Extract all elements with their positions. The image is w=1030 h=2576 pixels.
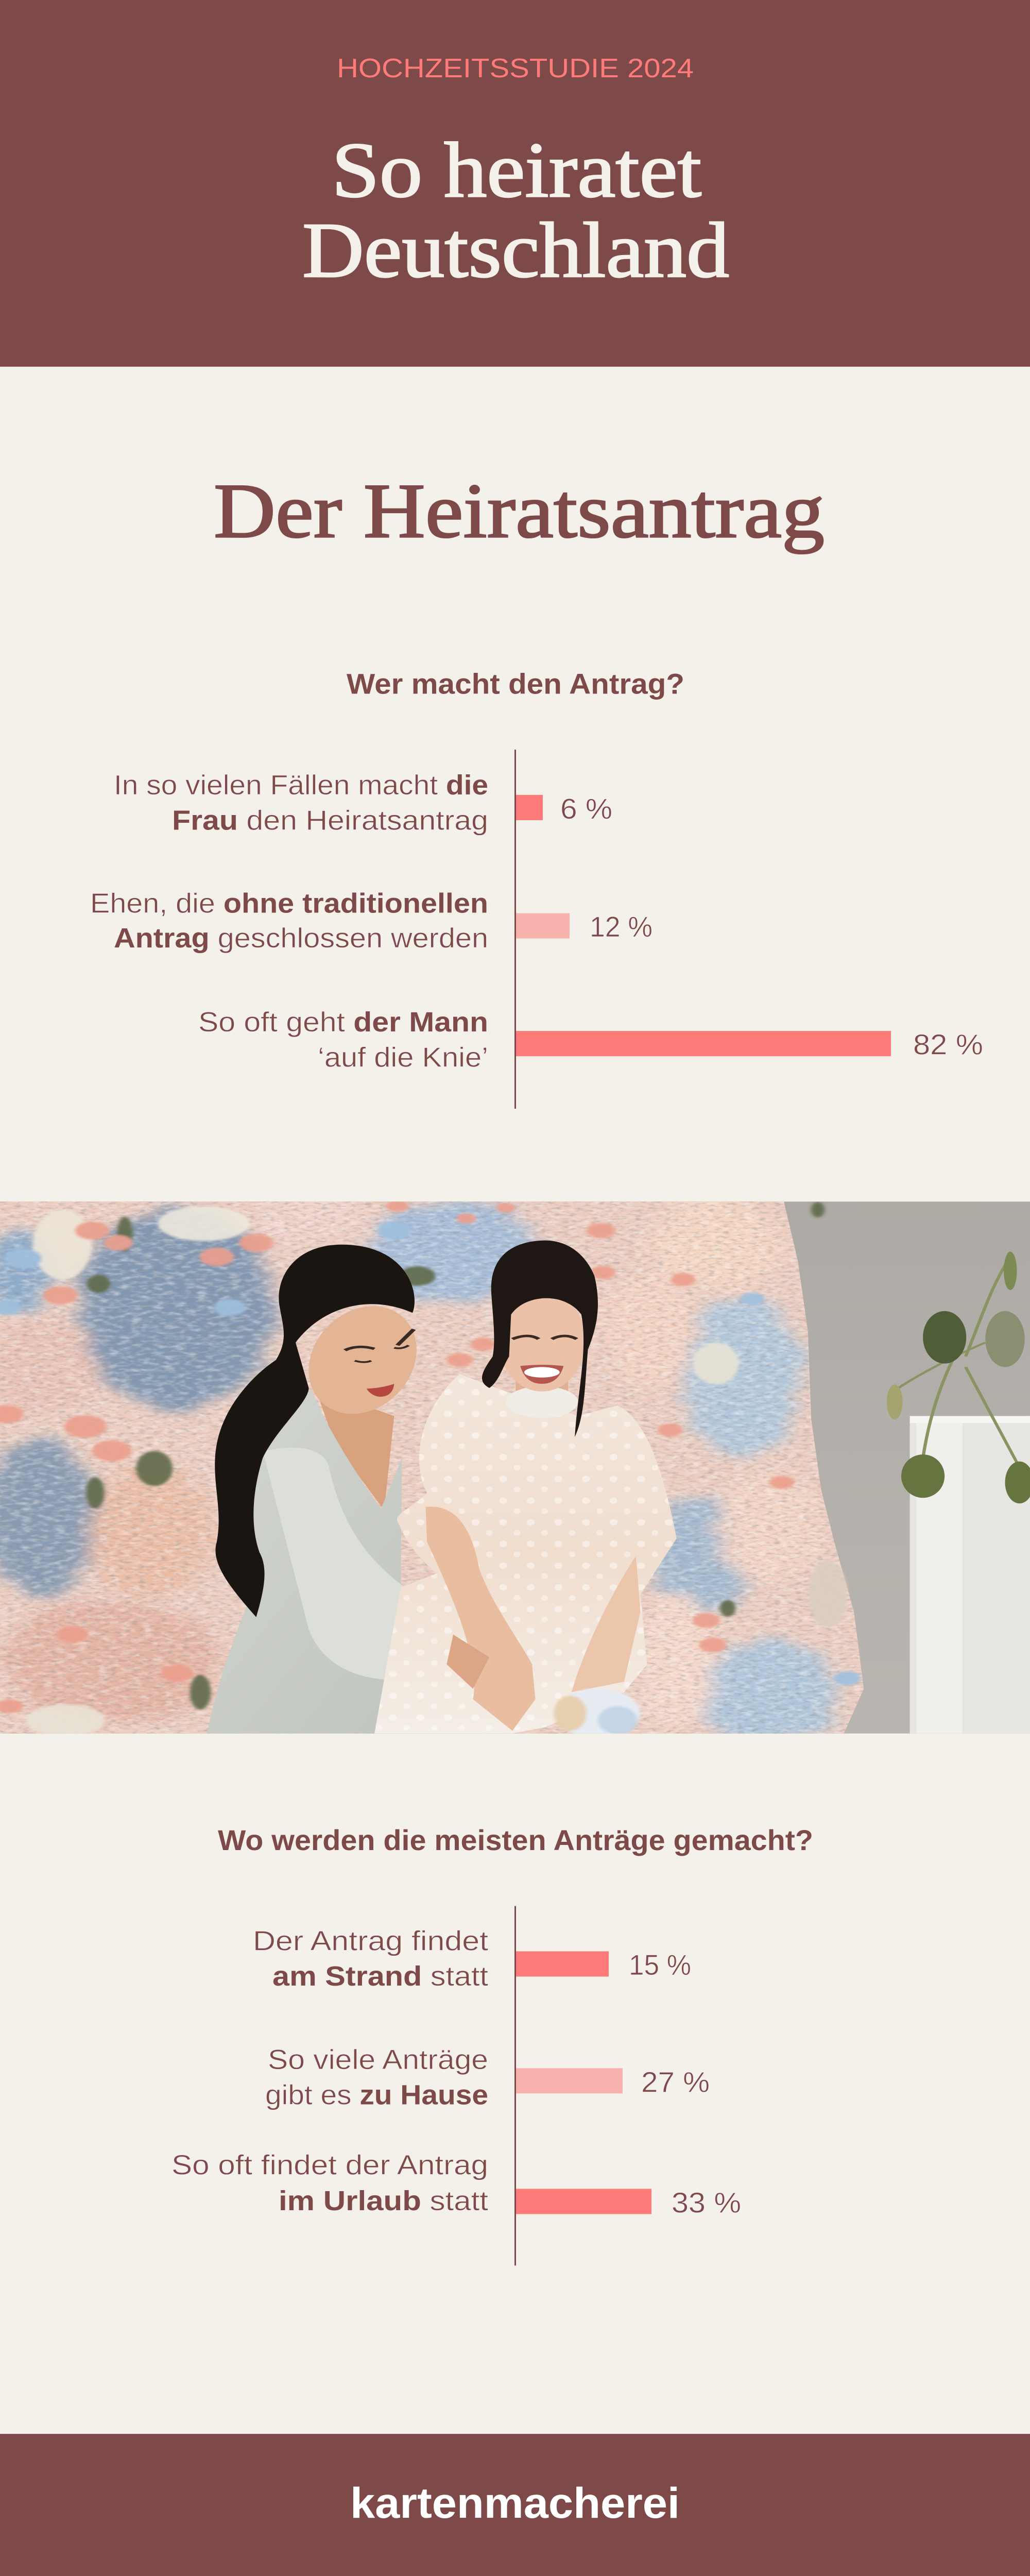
bar row: 33 % <box>171 2149 741 2219</box>
right woman <box>374 1241 677 1738</box>
bar row: 15 %: Der Antrag findet <box>253 1925 489 1956</box>
chart heading: Wo werden die meisten Anträge gemacht? <box>218 1825 813 1857</box>
chart heading: Wer macht den Antrag? <box>347 669 684 700</box>
bar chart: who proposes <box>90 750 983 1109</box>
bar row: 82 %: ‘auf die Knie’ <box>318 1042 488 1073</box>
bar row: 15 % <box>253 1925 691 1992</box>
bar row: 12 %: Antrag geschlossen werden <box>114 922 488 954</box>
bar row: 82 %: So oft geht der Mann <box>198 1006 488 1038</box>
bar row: 12 % <box>90 888 653 954</box>
header band <box>0 0 1030 367</box>
panel: where proposals happen <box>171 1825 813 2265</box>
bar row: 82 %: 82 % <box>913 1029 983 1061</box>
bar row: 27 % <box>265 2044 710 2110</box>
main title: Deutschland <box>302 207 729 294</box>
bar row: 33 %: im Urlaub statt <box>279 2185 489 2216</box>
wall <box>0 1192 1030 1740</box>
bar row: 27 %: gibt es zu Hause <box>265 2079 488 2110</box>
panel: who proposes <box>90 669 983 1109</box>
bar row: 27 %: 27 % <box>641 2067 710 2098</box>
bar row: 12 %: Ehen, die ohne traditionellen <box>90 888 488 919</box>
main title <box>302 127 729 294</box>
left woman <box>207 1245 473 1734</box>
bar row: 6 %: In so vielen Fällen macht die <box>114 769 488 801</box>
bar chart: where proposals happen <box>171 1906 741 2265</box>
feathers and roses <box>0 1200 861 1736</box>
bouquet <box>554 1689 641 1738</box>
bar row: 15 %: 15 % <box>629 1950 691 1981</box>
bar row: 12 %: 12 % <box>590 911 653 943</box>
bar row: 82 % <box>198 1006 983 1073</box>
petal texture <box>0 1192 873 1740</box>
bar row: 15 %: am Strand statt <box>272 1960 489 1992</box>
plant and pedestal <box>887 1251 1030 1734</box>
section heading: Der Heiratsantrag: Der Heiratsantrag <box>214 468 825 554</box>
logo wordmark: kartenmacherei <box>350 2480 680 2527</box>
bar row: 27 %: So viele Anträge <box>268 2044 488 2075</box>
bar row: 33 %: 33 % <box>672 2188 741 2219</box>
bar row: 6 %: 6 % <box>560 793 612 825</box>
bar row: 6 % <box>114 769 612 836</box>
bar row: 6 %: Frau den Heiratsantrag <box>172 805 488 836</box>
flower wall <box>0 1192 873 1744</box>
footer band with logo <box>0 2434 1030 2576</box>
main title: So heiratet <box>332 127 701 214</box>
dark leaf flecks <box>0 1192 873 1740</box>
bar row: 33 %: So oft findet der Antrag <box>171 2149 488 2180</box>
photo: two brides in front of a flower wall <box>0 1192 1030 1744</box>
eyebrow: study name: HOCHZEITSSTUDIE 2024 <box>337 54 694 83</box>
